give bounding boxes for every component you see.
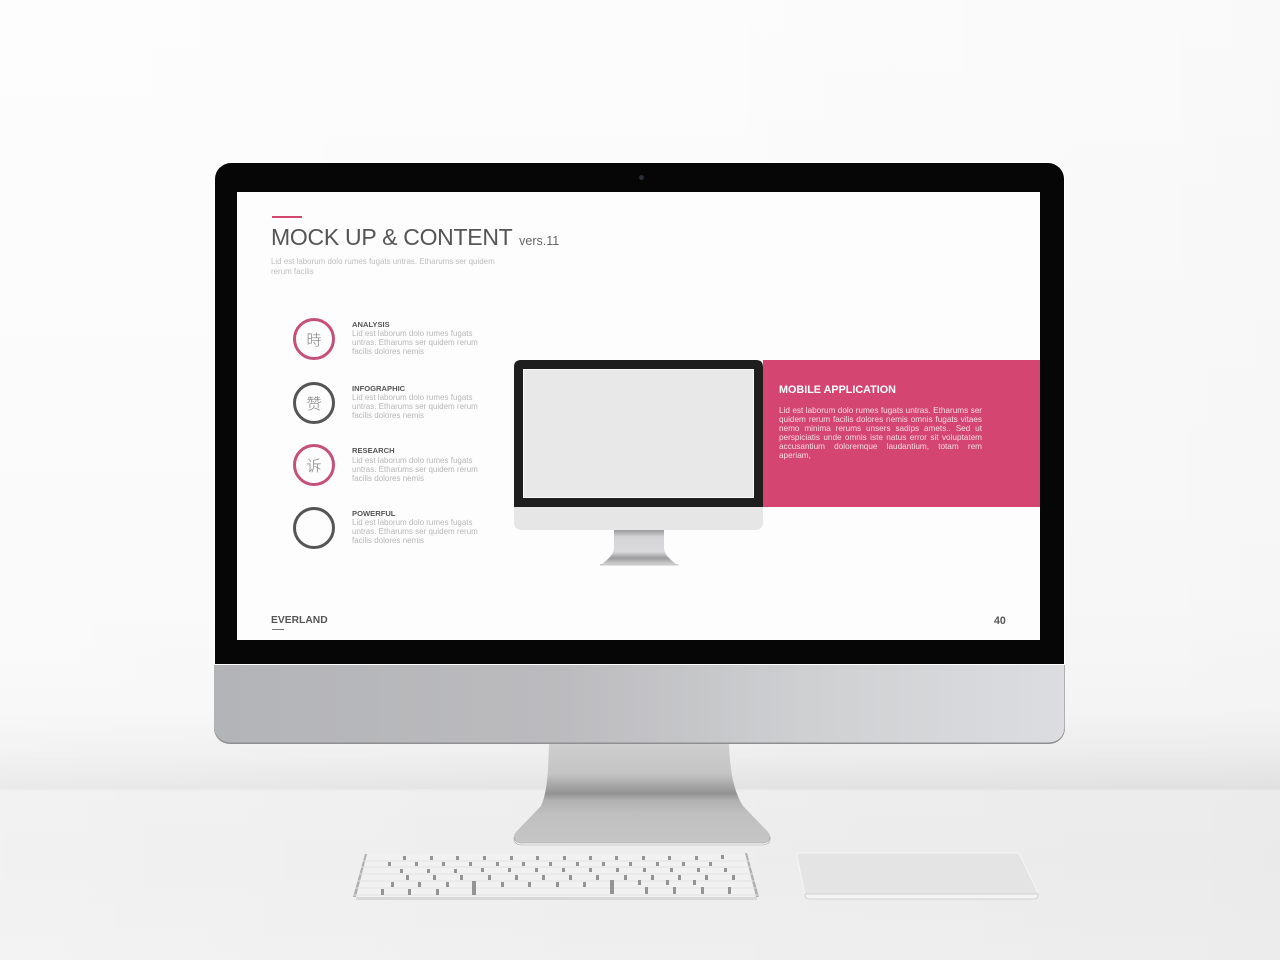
text block: analysis: untras. Etharums ser quidem rerum (352, 338, 478, 347)
subtitle text (271, 257, 495, 276)
description text: Lid est laborum dolo rumes fugats untras. Etharums ser (779, 406, 982, 415)
text block: infographic: facilis dolores nemis (352, 411, 424, 420)
text block: powerful (352, 509, 478, 545)
text block: analysis: facilis dolores nemis (352, 347, 424, 356)
description text: accusantium doloremque laudantium, totam rem (779, 442, 982, 451)
text block: analysis: ANALYSIS (352, 320, 390, 329)
text block: research: untras. Etharums ser quidem rerum (352, 465, 478, 474)
panel: slide screen (237, 192, 1040, 640)
page number: 40 (994, 615, 1006, 627)
icon: webcam (639, 175, 644, 180)
icon: circle analysis (293, 318, 335, 360)
text block: infographic: Lid est laborum dolo rumes fugats (352, 393, 473, 402)
icon: trackpad (796, 852, 1038, 900)
footer brand: EVERLAND (271, 615, 328, 626)
text block: analysis (352, 320, 478, 356)
icon: keyboard (353, 853, 759, 900)
icon: circle infographic: 赞 (306, 393, 322, 414)
text block: powerful: untras. Etharums ser quidem rerum (352, 527, 478, 536)
text block: research: Lid est laborum dolo rumes fugats (352, 456, 473, 465)
icon: circle infographic (293, 382, 335, 424)
subtitle text: rerum facilis (271, 266, 314, 276)
text block: research: RESEARCH (352, 446, 395, 455)
subtitle text: Lid est laborum dolo rumes fugats untras. Etharums ser quidem (271, 257, 495, 266)
icon: monitor bezel (215, 163, 1064, 664)
icon: circle analysis: 時 (306, 329, 322, 350)
panel: mobile application (763, 360, 1040, 507)
text block: powerful: Lid est laborum dolo rumes fugats (352, 518, 473, 527)
text block: research: facilis dolores nemis (352, 474, 424, 483)
text block: analysis: Lid est laborum dolo rumes fugats (352, 329, 473, 338)
text block: infographic: INFOGRAPHIC (352, 384, 405, 393)
text block: powerful: facilis dolores nemis (352, 536, 424, 545)
icon: monitor chin (214, 660, 1065, 744)
icon: small monitor mockup (514, 360, 763, 566)
icon: monitor stand (514, 744, 770, 846)
icon: circle powerful (293, 507, 335, 549)
title accent line (272, 216, 302, 218)
description text (779, 406, 982, 460)
title: MOCK UP & CONTENT vers.11 (271, 224, 559, 250)
icon: circle research: 诉 (306, 455, 322, 476)
description text: nemo minima rerums unsers sadips amets.. Sed ut (779, 424, 982, 433)
description text: aperiam, (779, 451, 811, 460)
text block: research (352, 446, 478, 483)
text block: powerful: POWERFUL (352, 509, 395, 518)
heading: mobile application: MOBILE APPLICATION (779, 384, 896, 396)
description text: perspiciatis unde omnis iste natus error sit voluptatem (779, 433, 982, 442)
description text: quidem rerum facilis dolores nemis omnis fugats vitaes (779, 415, 982, 424)
icon: circle research (293, 444, 335, 486)
text block: infographic: untras. Etharums ser quidem rerum (352, 402, 478, 411)
text block: infographic (352, 384, 478, 420)
